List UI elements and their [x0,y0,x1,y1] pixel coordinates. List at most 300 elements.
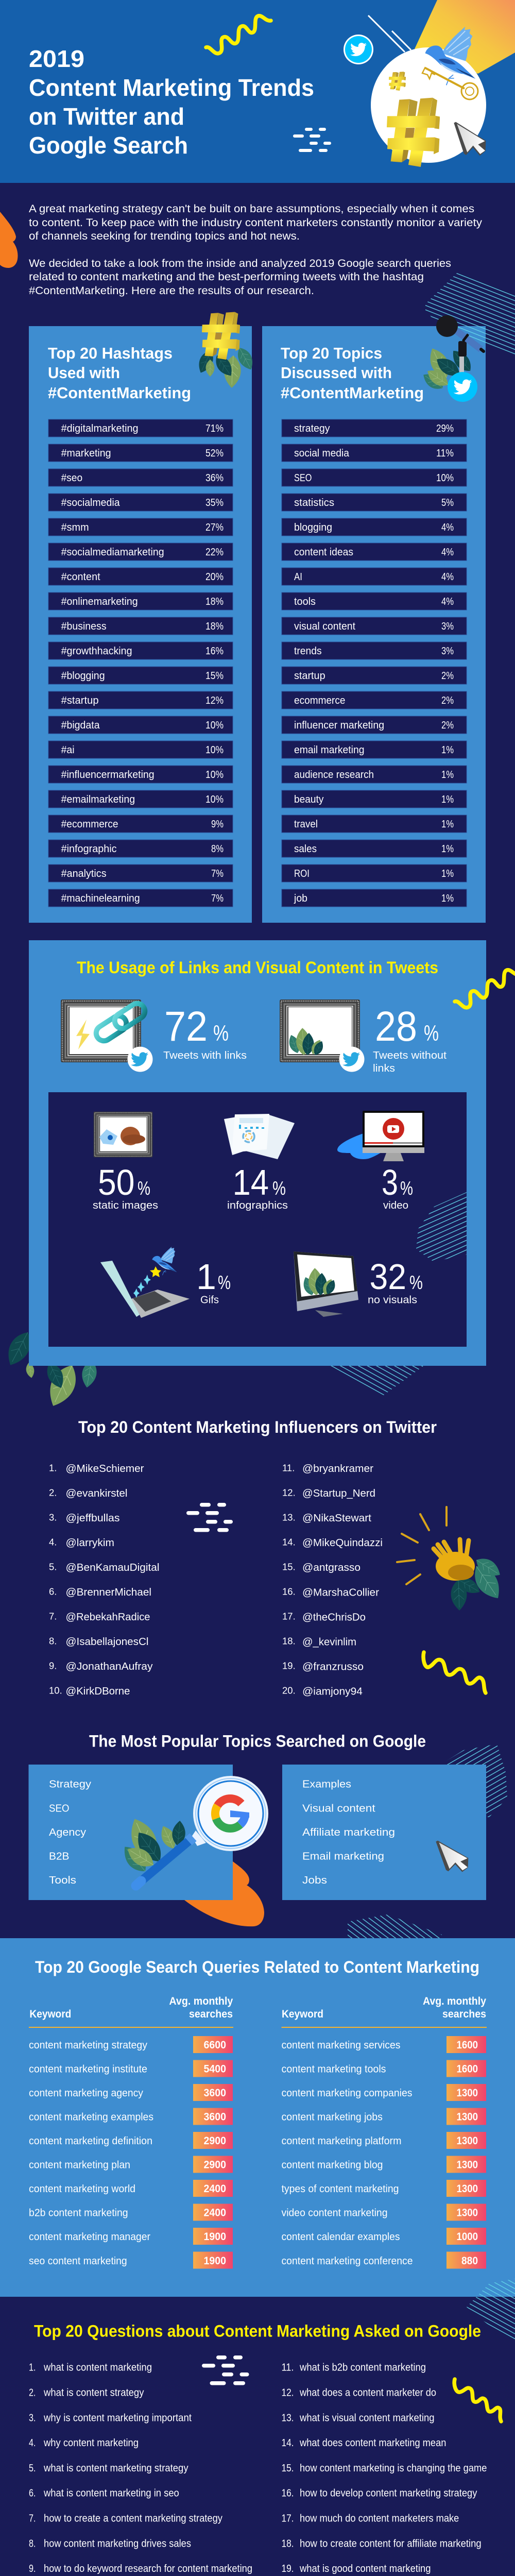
heading: influencers: Top 20 Content Marketing Influencers on Twitter [78,1418,437,1436]
icon: golden key [422,67,478,99]
list: questions left column: how to create a content marketing strategy [44,2512,223,2524]
icon: white dashes questions [202,2355,249,2385]
icon: gold clapping hand with sparks [397,1507,475,1584]
list: influencers right column: 16. [282,1586,296,1597]
topics table: 1% [441,769,454,781]
list: influencers right column: @theChrisDo [302,1612,366,1623]
frame with dog [94,1112,152,1157]
table rows right: content marketing conference [281,2255,413,2267]
hashtag table: 35% [205,497,224,509]
stat: 32% no visuals: 32 [370,1257,406,1297]
list: questions right column: what is visual content marketing [299,2412,435,2424]
list: questions left column: 5. [29,2462,36,2474]
topic list left: B2B [49,1851,69,1862]
intro text: We decided to take a look from the inside and analyzed 2019 Google search queries [29,258,451,269]
stat: 14% infographics [227,1162,288,1211]
list: influencers right column: 19. [282,1660,296,1671]
list: influencers left column: 10. [49,1685,62,1696]
table rows left: content marketing strategy [29,2039,148,2051]
table rows left: content marketing institute [29,2063,147,2075]
table rows right: 1300 [456,2183,478,2195]
list: influencers left column: 6. [49,1586,57,1597]
stat: 3% video: 3 [382,1162,398,1202]
hashtag table: 27% [205,521,224,533]
stat: 50% static images: static images [93,1199,158,1211]
list: influencers left column [49,1462,160,1697]
stat: 32% no visuals: no visuals [368,1294,417,1306]
table header right: Keyword [282,2008,323,2020]
topic list right [302,1778,395,1886]
stat: 1% gifs [196,1257,231,1306]
topics table: 1% [441,868,454,879]
hashtag table: 36% [205,472,224,484]
hashtag table: 18% [205,620,224,632]
topic list left: Agency [49,1826,87,1838]
list: influencers right column: @MikeQuindazzi [302,1537,383,1549]
list: influencers left column: @IsabellajonesCl [66,1636,148,1648]
panel: usage of links and visual content [29,940,486,1366]
stat: 50% static images [93,1162,158,1211]
table rows left [29,2036,233,2269]
hashtag table: #machinelearning [61,892,140,904]
icon: white dashes mid [186,1503,233,1532]
list: questions left column: 6. [29,2487,36,2499]
list: influencers right column: 14. [282,1536,296,1548]
table rows left: 2900 [204,2135,226,2147]
table rows right: content marketing services [281,2039,401,2051]
table rows right: 1300 [456,2135,478,2147]
table rows left: content marketing examples [29,2111,153,2123]
list: questions right column: 14. [281,2437,294,2449]
topics table: trends [294,645,322,657]
panel: google topics right [282,1765,486,1900]
list: influencers right column: @MarshaCollier [302,1587,379,1598]
panel: visual content inner [48,1092,467,1347]
list: influencers left column: 7. [49,1611,57,1622]
topics table: statistics [294,497,334,509]
topics table: 3% [441,620,454,632]
list: questions right column: what is b2b content marketing [299,2362,426,2374]
icon: yellow squiggle questions [454,2379,501,2421]
heading: top 20 topics: Top 20 Topics [281,344,382,362]
topics table: 1% [441,793,454,805]
table rows left: 1900 [204,2255,226,2267]
icon: leaves under gold hand [451,1554,506,1611]
icon: paper sheets [224,1114,295,1159]
icon: leaves behind panel hash [195,345,256,388]
hashtag table: #onlinemarketing [61,596,138,607]
table rows left: 3600 [204,2111,226,2123]
list: influencers left column: @BrennerMichael [66,1586,151,1598]
stat: 28% tweets without links: links [373,1062,395,1074]
topic list left: SEO [49,1802,69,1815]
icon: panel hash [202,312,240,360]
list: questions left column: what is content marketing [43,2362,152,2374]
hashtag table: #analytics [61,868,107,879]
list: influencers right column: 15. [282,1561,296,1572]
list: questions left column: 8. [29,2537,36,2549]
table rows right: 1300 [456,2087,478,2099]
hashtag table: 7% [211,892,224,904]
panel: top 20 topics [262,326,486,923]
hashtag table: #ecommerce [61,818,118,830]
hashtag table: 7% [211,868,224,879]
list: influencers left column: @larrykim [66,1537,114,1549]
topics table: 5% [441,497,454,509]
list: influencers left column: @evankirstel [66,1487,128,1499]
icon: twitter badge [344,35,373,64]
topics table: ecommerce [294,694,345,706]
list: questions left column: 2. [29,2386,36,2399]
topic list left: Tools [49,1874,76,1886]
icon: blue bird [425,27,475,85]
topics table: strategy [294,422,330,434]
list: questions right column: what does a content marketer do [299,2386,436,2399]
list: influencers left column: @KirkDBorne [66,1685,130,1697]
table rows right: 1000 [456,2231,478,2243]
hashtag table: #emailmarketing [61,793,135,805]
hashtag table: #influencermarketing [61,769,154,781]
intro text: related to content marketing and the best-performing tweets with the hashtag [29,271,424,283]
cyan stripes behind right box [440,1744,507,1817]
panel: google topics left [29,1765,233,1900]
list: influencers right column: @antgrasso [302,1562,360,1573]
hashtag table: #bigdata [61,719,100,731]
list: questions right column: how content marketing is changing the game [300,2462,487,2474]
list: influencers left column: 3. [49,1512,57,1523]
topics table: sales [294,843,317,855]
list: questions right column: how much do content marketers make [300,2512,459,2524]
stat: 32% no visuals [368,1257,423,1306]
stat: 1% gifs: % [218,1272,231,1293]
list: influencers left column: @BenKamauDigital [66,1562,160,1573]
table rows right: content calendar examples [281,2231,400,2243]
list: questions right column: what is good content marketing [299,2563,431,2574]
list: questions left column [29,2362,252,2576]
list: questions left column: 4. [29,2437,36,2449]
list: influencers right column: 11. [282,1462,295,1473]
panel: top 20 google search queries [0,1938,515,2297]
header band [0,0,515,183]
list: questions right column: what does content marketing mean [299,2437,446,2449]
list: influencers right column: @NikaStewart [302,1512,371,1524]
title: 2019 [29,45,84,72]
table header left: Keyword [29,2008,71,2020]
title: Content Marketing Trends [29,74,314,101]
hashtag table: 52% [205,447,224,459]
hashtag table: 9% [211,818,224,830]
topics table: 4% [441,596,454,607]
topic list left [49,1778,92,1886]
list: questions left column: how content marketing drives sales [44,2537,191,2549]
heading: queries: Top 20 Google Search Queries Related to Content Marketing [35,1958,479,1976]
cyan stripes under panel [324,1366,424,1395]
table rows right: content marketing blog [281,2159,383,2171]
cyan stripes in panel [416,1192,467,1262]
stat: 3% video [382,1162,413,1211]
stat: 72% tweets with links: Tweets with links [163,1049,247,1061]
heading: top 20 hashtags: #ContentMarketing [48,384,191,402]
heading: top 20 hashtags: Top 20 Hashtags [48,344,173,362]
microphone holder [458,341,467,357]
table rows left: content marketing world [29,2183,135,2195]
hashtag table: 71% [205,422,224,434]
heading: top 20 topics [281,344,424,402]
topics table: 3% [441,645,454,657]
hashtag table: #seo [61,472,82,484]
list: influencers left column: @MikeSchiemer [66,1463,144,1475]
list: questions right column: 19. [281,2563,294,2574]
list: influencers left column: @RebekahRadice [66,1611,150,1623]
intro text: A great marketing strategy can't be built on bare assumptions, especially when it comes [29,203,474,215]
hashtag table: #digitalmarketing [61,422,139,434]
icon: yellow squiggle down [423,1652,486,1693]
topic list right: Affiliate marketing [302,1826,395,1838]
heading: questions: Top 20 Questions about Content Marketing Asked on Google [34,2321,481,2340]
topics table: content ideas [294,546,353,558]
hashtag table: 22% [205,546,224,558]
topics table: 29% [436,422,454,434]
title [29,45,314,159]
table rows left: 2400 [204,2207,226,2218]
icon: magnifier with google logo [136,1776,268,1886]
table header right: Avg. monthly [423,1995,486,2007]
icon: leaves and microphone [420,315,484,393]
twitter badge [339,1047,365,1072]
heading: top 20 hashtags: Used with [48,364,120,382]
topics table: 1% [441,818,454,830]
table rows left: content marketing definition [29,2135,152,2147]
stat: 1% gifs: Gifs [200,1294,219,1306]
topics table [282,419,467,907]
cyan stripes bottom [348,1914,442,1938]
frame with link chain [61,999,152,1072]
hashtag table: 10% [205,793,224,805]
hashtag table: 10% [205,719,224,731]
stat: 3% video: % [400,1178,413,1199]
topics table: tools [294,596,316,607]
table rows left: 1900 [204,2231,226,2243]
list: influencers left column: @JonathanAufray [66,1660,153,1672]
hashtag table: #socialmedia [61,497,120,509]
table rows left: 5400 [204,2063,226,2075]
list: influencers left column: 2. [49,1487,57,1498]
hashtag table: #smm [61,521,89,533]
list: influencers left column: 8. [49,1635,57,1647]
icon: white dashes [293,128,331,152]
icon: imac with leaves [294,1251,358,1317]
topics table: job [294,892,307,904]
hashtag table: #infographic [61,843,117,855]
stat: 14% infographics: % [272,1178,286,1199]
heading: top 20 topics: Discussed with [281,364,392,382]
table rows right: content marketing companies [281,2087,412,2099]
table rows right: content marketing jobs [281,2111,383,2123]
stat: 1% gifs: 1 [196,1257,216,1297]
intro text: #ContentMarketing. Here are the results of our research. [29,285,314,297]
topics table: travel [294,818,318,830]
list: influencers right column: @bryankramer [302,1463,373,1475]
hashtag table: 10% [205,769,224,781]
topics table: AI [294,571,302,583]
stat: 14% infographics: 14 [233,1162,269,1202]
list: questions left column: what is content strategy [43,2386,144,2399]
microphone body [456,331,481,349]
stat: 72% tweets with links: 72 [164,1003,208,1050]
twitter badge [128,1047,152,1072]
topics table: 2% [441,670,454,682]
stat: 28% tweets without links: 28 [375,1003,417,1050]
stat: 32% no visuals: % [409,1272,423,1293]
topics table: beauty [294,793,324,805]
topic list left: Strategy [49,1778,92,1790]
list: influencers right column: @franzrusso [302,1661,364,1672]
icon: twitter badge on panel [448,372,477,402]
topics table: visual content [294,620,355,632]
white diagonal lines [368,15,411,52]
hashtag table: 16% [205,645,224,657]
white circle [371,47,486,163]
table rows right: 1300 [456,2207,478,2218]
table header left: searches [189,2008,233,2020]
hashtag table: 12% [205,694,224,706]
table rows left: 6600 [204,2039,226,2051]
table rows right: 1600 [456,2063,478,2075]
icon: yellow squiggle over panel [455,970,515,1008]
table rows right: 880 [461,2255,478,2267]
list: influencers right column: 17. [282,1611,296,1622]
hashtag table: #growthhacking [61,645,132,657]
hashtag table: #blogging [61,670,105,682]
table rows right: 1300 [456,2111,478,2123]
intro text: to content. To keep pace with the industry content marketers constantly monitor a variety [29,217,483,229]
table rows right: types of content marketing [281,2183,399,2195]
cyan stripes across section boundary [467,2279,515,2342]
list: questions left column: why is content marketing important [43,2412,192,2424]
hashtag table [48,419,233,907]
list: questions right column: 11. [281,2362,294,2374]
list: questions right column [281,2362,492,2576]
stat: 50% static images: 50 [98,1162,135,1202]
list: questions right column: how to create content for affiliate marketing [300,2537,482,2549]
list: influencers left column: 5. [49,1561,57,1572]
stat: 28% tweets without links: Tweets without [373,1049,447,1061]
list: questions left column: 3. [29,2412,36,2424]
list: questions left column: why content marketing [43,2437,139,2449]
topics table: email marketing [294,744,365,756]
topics table: social media [294,447,350,459]
google G [215,1799,245,1828]
hashtag table: #content [61,571,100,583]
icon: yellow squiggle [206,16,271,54]
stat: 28% tweets without links [373,1003,447,1074]
table rows left: 2400 [204,2183,226,2195]
list: influencers left column: 9. [49,1660,57,1671]
hashtag table: 8% [211,843,224,855]
orange blob left [0,212,18,268]
blue blob behind monitor [337,1129,382,1159]
icon: large gold hash [387,98,440,167]
table rows left: content marketing manager [29,2231,150,2243]
list: influencers right column: 20. [282,1685,296,1696]
table rows left: 3600 [204,2087,226,2099]
hashtag table: 18% [205,596,224,607]
list: questions left column: what is content marketing in seo [43,2487,179,2499]
table header left: Avg. monthly [169,1995,233,2007]
topics table: influencer marketing [294,719,384,731]
list: questions left column: what is content marketing strategy [43,2462,188,2474]
table rows left: content marketing plan [29,2159,130,2171]
stat: 28% tweets without links: % [424,1021,439,1046]
topic list right: Jobs [302,1874,327,1886]
topics table: 1% [441,843,454,855]
heading: top 20 hashtags [48,344,191,402]
icon: cursor [454,122,486,156]
list: influencers left column: @jeffbullas [66,1512,119,1524]
intro text [29,203,483,297]
list: questions right column: 16. [281,2487,294,2499]
stat: 14% infographics: infographics [227,1199,288,1211]
hashtag table: 15% [205,670,224,682]
intro text: of channels seeking for trending topics and hot news. [29,230,300,242]
list: questions right column: 17. [281,2512,294,2524]
topics table: SEO [294,472,312,484]
topics table: 2% [441,719,454,731]
table rows right: video content marketing [281,2207,387,2218]
topics table: startup [294,670,325,682]
heading: top 20 topics: #ContentMarketing [281,384,424,402]
table rows left: seo content marketing [29,2255,127,2267]
table rows right [281,2036,486,2269]
table header right: searches [442,2008,486,2020]
list: influencers right column: @Startup_Nerd [302,1487,375,1499]
table rows left: b2b content marketing [29,2207,128,2218]
panel: top 20 hashtags [29,326,252,923]
stat: 72% tweets with links: % [213,1021,229,1046]
heading: usage: The Usage of Links and Visual Content in Tweets [77,958,438,977]
icon: laptop with stars and bird [100,1247,190,1318]
list: questions left column: 1. [29,2362,36,2374]
topics table: 1% [441,892,454,904]
list: questions right column: 15. [281,2462,294,2474]
stat: 3% video: video [383,1199,408,1211]
list: influencers right column: @_kevinlim [302,1636,356,1648]
topics table: 4% [441,521,454,533]
topic list right: Examples [302,1778,351,1790]
hashtag table: 20% [205,571,224,583]
table rows left: 2900 [204,2159,226,2171]
table header right [281,1995,487,2028]
orange blob [184,1861,264,1926]
table rows right: 1600 [456,2039,478,2051]
list: questions right column: 18. [281,2537,294,2549]
topics table: 4% [441,571,454,583]
icon: video monitor [363,1111,424,1161]
stat: 72% tweets with links [163,1003,247,1061]
list: questions right column: how to develop content marketing strategy [300,2487,477,2499]
cyan stripes top right [425,273,515,357]
table rows left: content marketing agency [29,2087,144,2099]
hashtag table: #ai [61,744,75,756]
list: influencers left column: 4. [49,1536,57,1548]
microphone pole [459,355,464,376]
list: questions left column: 9. [29,2563,36,2574]
list: influencers right column: 13. [282,1512,296,1523]
list: influencers right column [282,1462,383,1697]
table rows right: content marketing tools [281,2063,386,2075]
frame with leaves [280,999,365,1072]
microphone head [436,315,458,337]
